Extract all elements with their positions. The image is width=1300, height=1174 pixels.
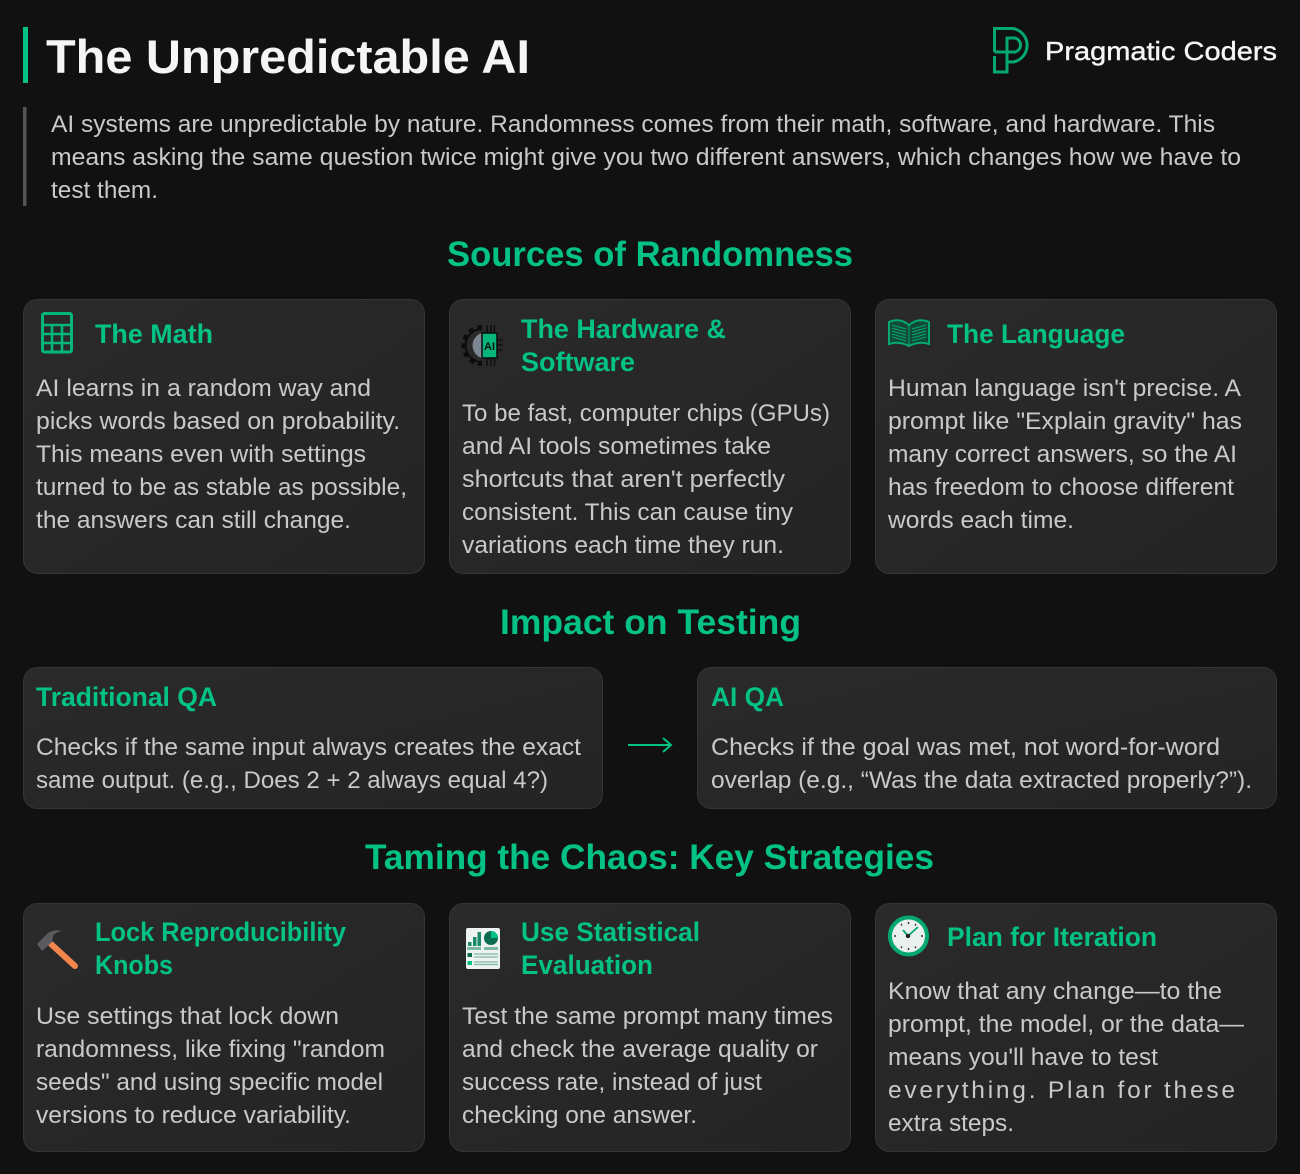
- logo: Pragmatic Coders: Pragmatic Coders: [1045, 36, 1277, 66]
- body text: [36, 734, 581, 794]
- icon: statistics report: [466, 928, 500, 969]
- body text: consistent. This can cause tiny: [462, 499, 794, 526]
- heading: Lock Reproducibility Knobs: Lock Reproducibility: [95, 917, 346, 947]
- icon: clock: [890, 918, 927, 954]
- body text: the answers can still change.: [36, 507, 351, 534]
- panel: Plan for Iteration: [876, 904, 1276, 1152]
- body text: same output. (e.g., Does 2 + 2 always equal 4?): [36, 767, 548, 794]
- icon: open book: [889, 320, 929, 346]
- heading: Lock Reproducibility Knobs: [95, 917, 346, 980]
- body text: Use settings that lock down: [36, 1003, 339, 1030]
- heading: The Hardware & Software: [521, 314, 726, 377]
- body text: has freedom to choose different: [888, 474, 1234, 501]
- body text: To be fast, computer chips (GPUs): [462, 400, 830, 427]
- heading: Plan for Iteration: Plan for Iteration: [947, 922, 1157, 952]
- body text: [711, 734, 1252, 794]
- body text: and check the average quality or: [462, 1036, 818, 1063]
- intro text: AI systems are unpredictable by nature. Randomness comes from their math, software, and hardware. This: [51, 111, 1215, 138]
- body text: Human language isn't precise. A: [888, 375, 1242, 402]
- heading: The Language: The Language: [947, 319, 1125, 349]
- body text: overlap (e.g., “Was the data extracted properly?”).: [711, 767, 1252, 794]
- body text: [36, 1003, 385, 1129]
- heading: The Math: The Math: [95, 319, 213, 349]
- body text: This means even with settings: [36, 441, 366, 468]
- heading: The Hardware & Software: Software: [521, 347, 635, 377]
- panel: The Math: [24, 300, 424, 574]
- body text: many correct answers, so the AI: [888, 441, 1237, 468]
- panel: The Language: [876, 300, 1276, 574]
- heading: Traditional QA: Traditional QA: [36, 682, 217, 712]
- body text: picks words based on probability.: [36, 408, 400, 435]
- body text: success rate, instead of just: [462, 1069, 762, 1096]
- body text: seeds" and using specific model: [36, 1069, 383, 1096]
- heading: Impact on Testing: Impact on Testing: [500, 603, 801, 642]
- body text: words each time.: [887, 507, 1074, 534]
- panel: Lock Reproducibility Knobs: [24, 904, 424, 1152]
- intro text: means asking the same question twice might give you two different answers, which changes how we have to: [51, 144, 1241, 171]
- icon: hammer: [37, 930, 75, 966]
- body text: [888, 978, 1244, 1137]
- logo: Pragmatic Coders: [994, 28, 1277, 72]
- body text: extra steps.: [888, 1110, 1014, 1137]
- body text: and AI tools sometimes take: [462, 433, 771, 460]
- body text: variations each time they run.: [462, 532, 784, 559]
- body text: versions to reduce variability.: [36, 1102, 351, 1129]
- heading: AI QA: AI QA: [711, 682, 784, 712]
- heading: The Hardware & Software: The Hardware &: [521, 314, 726, 344]
- heading: Sources of Randomness: Sources of Randomness: [447, 235, 853, 274]
- body text: prompt like "Explain gravity" has: [888, 408, 1242, 435]
- panel: Traditional QA: [24, 668, 602, 808]
- intro text: [23, 107, 1241, 206]
- icon: calculator: [42, 314, 72, 352]
- intro text: test them.: [51, 177, 158, 204]
- body text: shortcuts that aren't perfectly: [462, 466, 786, 493]
- body text: everything. Plan for these: [888, 1077, 1235, 1104]
- body text: Checks if the same input always creates the exact: [36, 734, 581, 761]
- body text: prompt, the model, or the data—: [888, 1011, 1244, 1038]
- body text: [462, 1003, 833, 1129]
- body text: checking one answer.: [462, 1102, 697, 1129]
- body text: Test the same prompt many times: [462, 1003, 833, 1030]
- icon: AI chip and gear: [464, 325, 503, 366]
- title: The Unpredictable AI: [46, 30, 530, 83]
- body text: [462, 400, 830, 559]
- panel: The Hardware & Software: [450, 300, 850, 574]
- panel: Use Statistical Evaluation: [450, 904, 850, 1152]
- heading: Use Statistical Evaluation: Use Statistical: [521, 917, 700, 947]
- heading: Use Statistical Evaluation: [521, 917, 700, 980]
- body text: [36, 375, 407, 534]
- heading: Use Statistical Evaluation: Evaluation: [521, 950, 653, 980]
- body text: AI learns in a random way and: [36, 375, 371, 402]
- body text: means you'll have to test: [888, 1044, 1158, 1071]
- body text: Know that any change—to the: [888, 978, 1222, 1005]
- heading: Taming the Chaos: Taming the Chaos: Key Strategies: [365, 838, 934, 877]
- arrow: [628, 738, 671, 752]
- body text: Checks if the goal was met, not word-for-word: [711, 734, 1220, 761]
- heading: Lock Reproducibility Knobs: Knobs: [95, 950, 173, 980]
- body text: turned to be as stable as possible,: [36, 474, 407, 501]
- icon: AI chip and gear: AI: [484, 341, 495, 353]
- body text: randomness, like fixing "random: [36, 1036, 385, 1063]
- panel: AI QA: [698, 668, 1276, 808]
- body text: [887, 375, 1242, 534]
